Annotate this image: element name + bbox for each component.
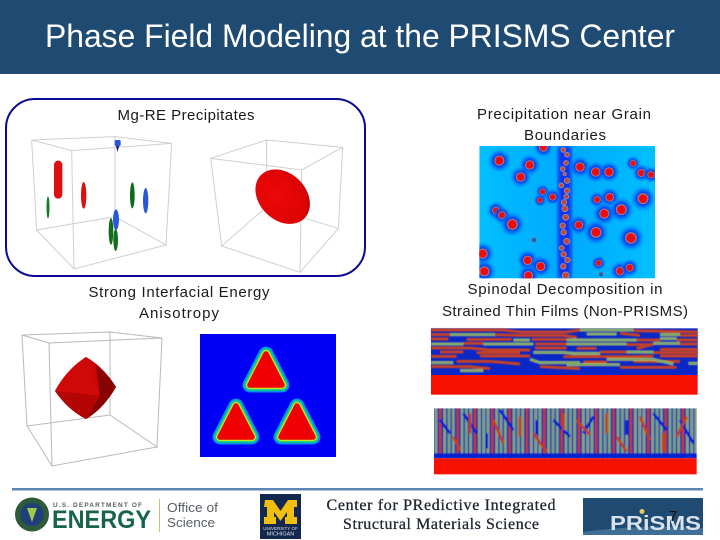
heading: Precipitation near Grain Boundaries [477,106,651,144]
logo: U.S. Department of Energy Office of Science: Science [167,515,215,530]
chart: precipitates near grain boundary [479,146,655,278]
logo: University of Michigan: MICHIGAN [267,532,294,538]
chart: triangular precipitates [200,334,336,457]
logo: PRISMS [583,498,703,535]
logo: PRISMS: PRiSMS [610,513,701,535]
text block: center name: Center for PRedictive Integrated [326,497,556,514]
heading: Mg-RE Precipitates: Mg-RE Precipitates [118,107,254,124]
chart: spinodal film, horizontal lamellae [431,328,698,395]
panel: Mg-RE precipitates [6,99,365,276]
logo: U.S. Department of Energy Office of Science: ENERGY [52,506,151,534]
text block: center name: Structural Materials Science [343,516,539,533]
chart: single-precipitate cube [211,140,343,272]
chart: octahedral precipitate cube [22,332,162,466]
heading: Precipitation near Grain Boundaries: Precipitation near Grain [477,106,651,123]
page number: 7 [669,508,677,525]
title: Phase Field Modeling at the PRISMS Center [45,18,675,54]
logo: University of Michigan [260,494,301,539]
chart: spinodal film, vertical lamellae [430,405,700,474]
heading: Spinodal Decomposition in Strained Thin Films: Strained Thin Films (Non-PRISMS) [442,303,688,320]
header band [0,0,720,74]
logo: U.S. Department of Energy Office of Science: Office of [167,500,218,515]
logo: U.S. Department of Energy Office of Science: U.S. DEPARTMENT OF [53,502,142,509]
heading: Spinodal Decomposition in Strained Thin Films: Spinodal Decomposition in [468,281,662,298]
text block: center name [326,497,556,533]
heading: Strong Interfacial Energy Anisotropy [88,284,270,322]
heading: Precipitation near Grain Boundaries: Boundaries [524,127,606,144]
heading: Strong Interfacial Energy Anisotropy: Strong Interfacial Energy [88,284,270,301]
icon: DOE seal [15,498,49,532]
divider rule [12,488,703,490]
heading: Strong Interfacial Energy Anisotropy: Anisotropy [139,305,220,322]
chart: multi-precipitate cube [32,137,172,269]
logo: University of Michigan: UNIVERSITY OF [263,526,298,531]
logo: U.S. Department of Energy Office of Science [15,498,218,534]
heading: Spinodal Decomposition in Strained Thin Films [442,281,688,320]
